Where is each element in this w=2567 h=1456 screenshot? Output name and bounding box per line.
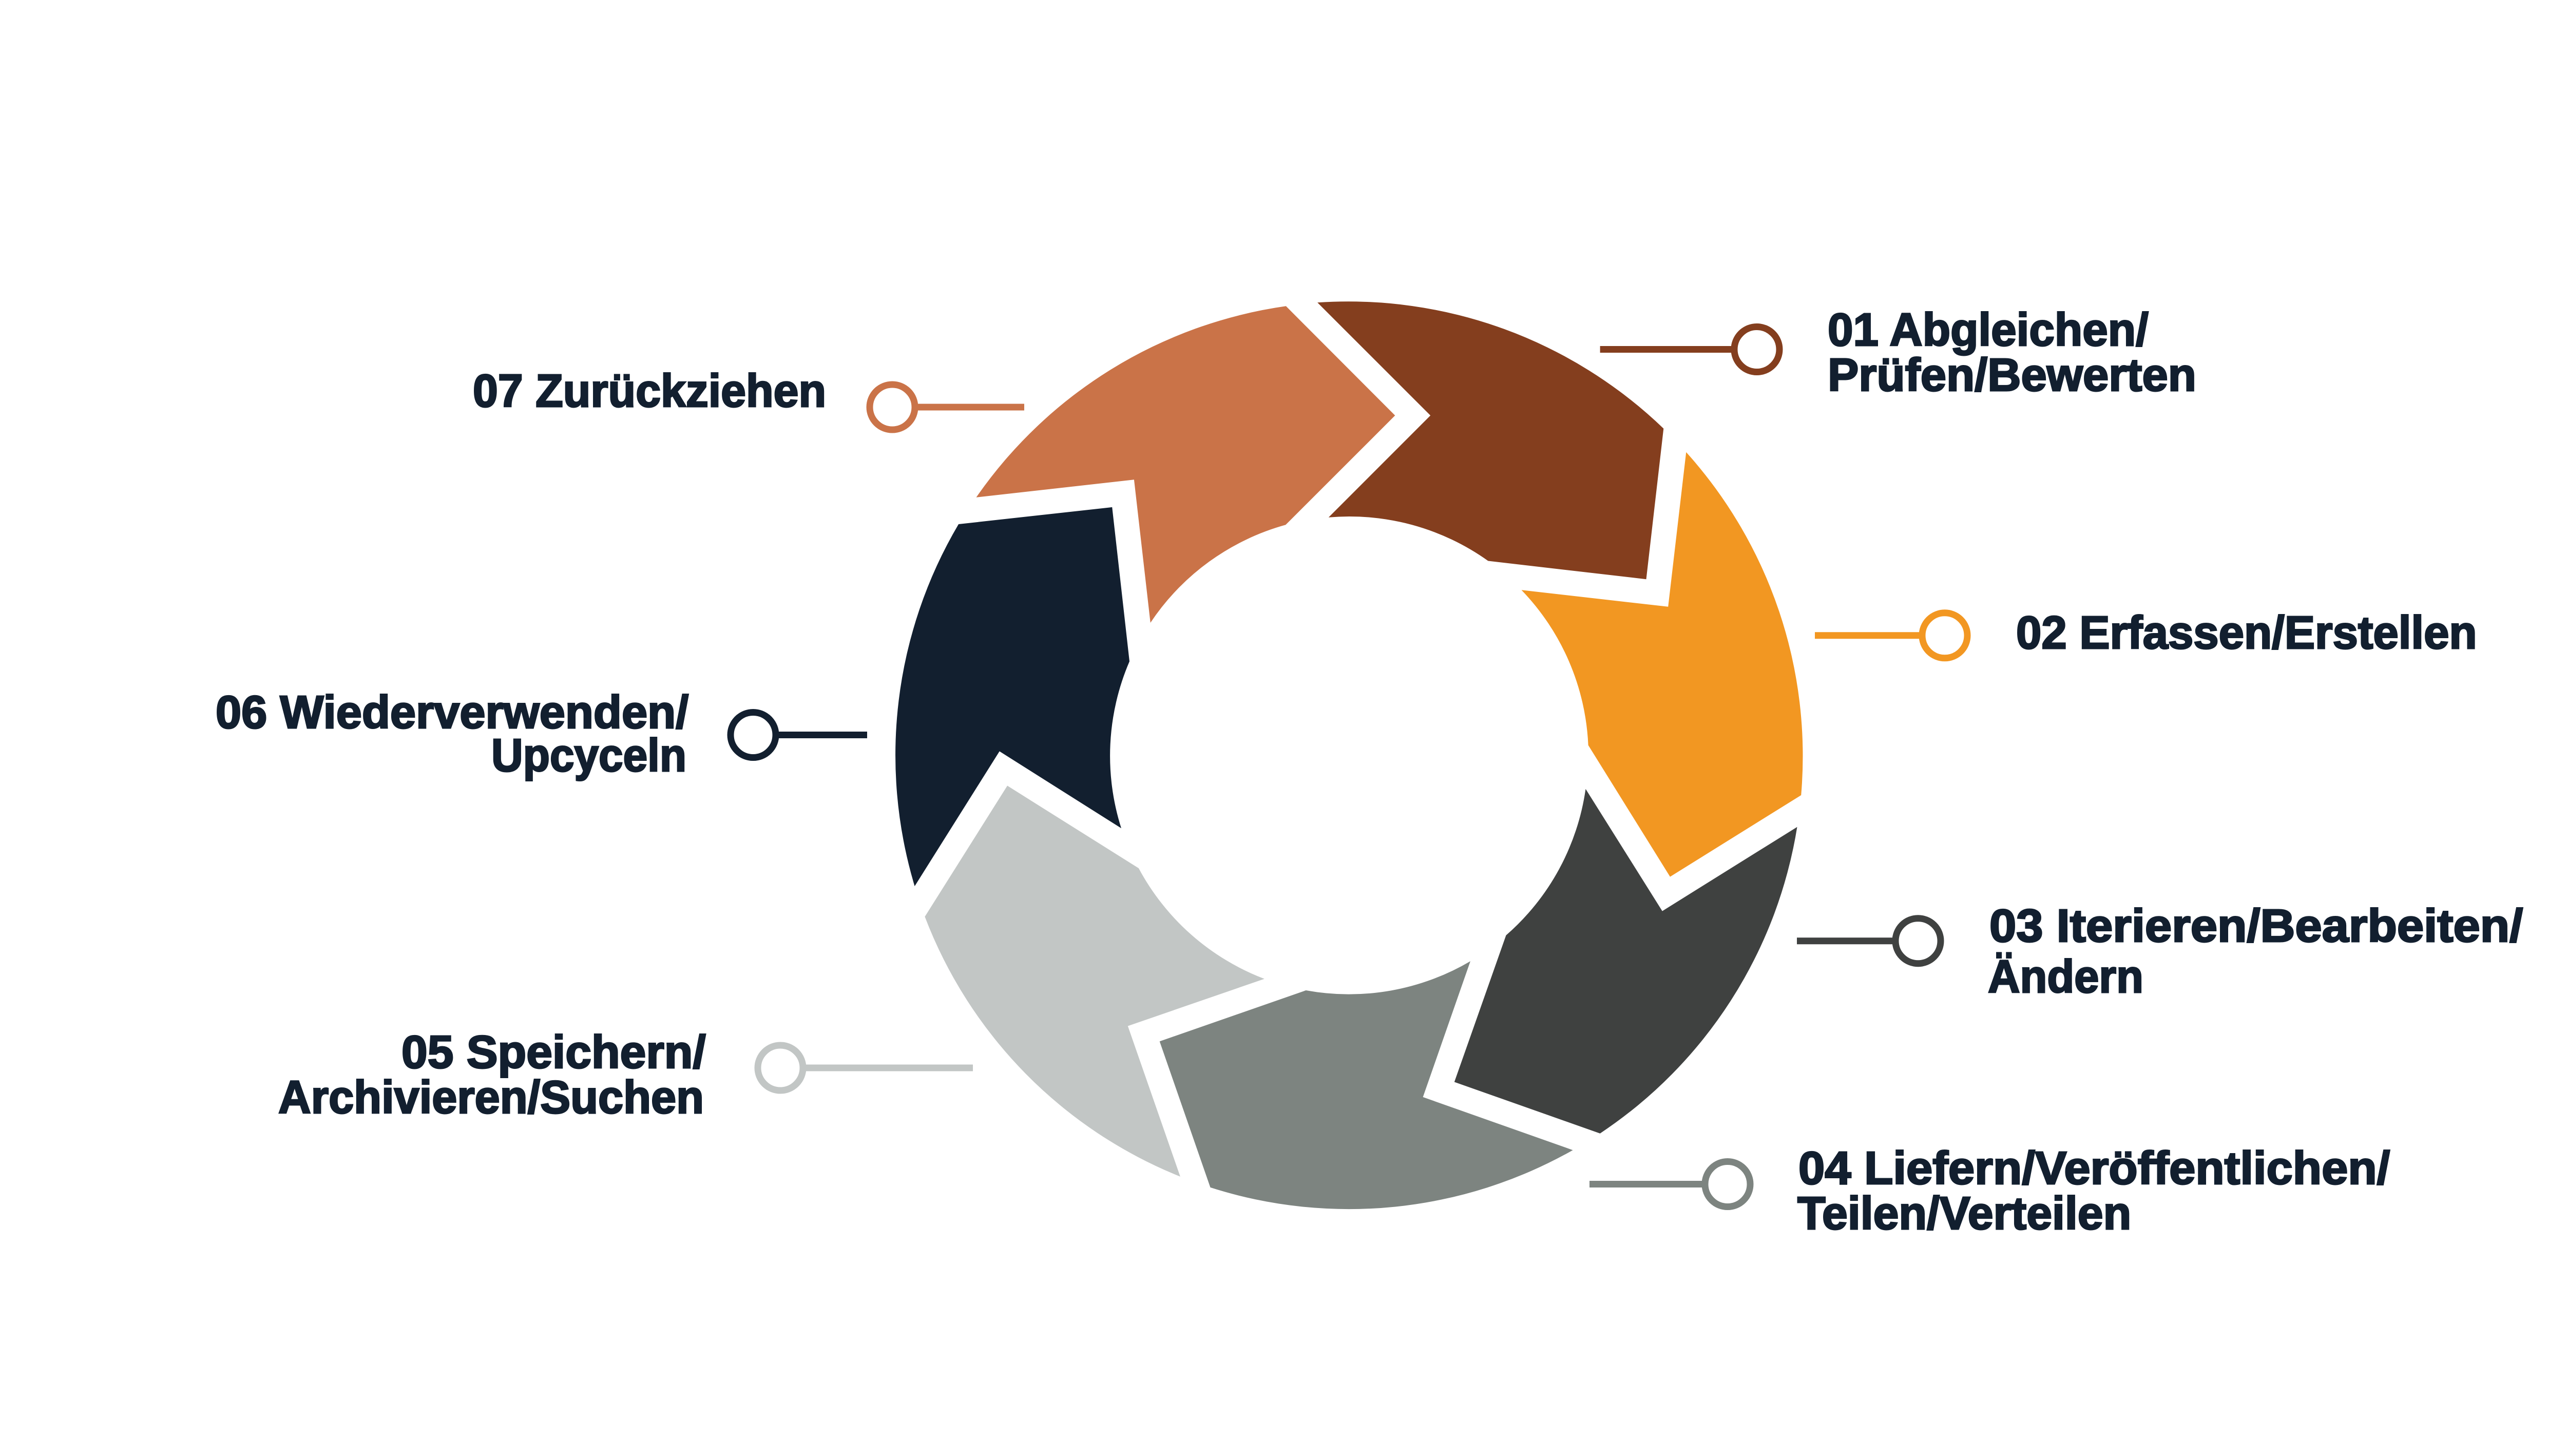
callout 01 Abgleichen	[1600, 304, 2196, 401]
connector 06	[731, 713, 867, 758]
callout 07 Zurückziehen	[473, 365, 1024, 430]
connector 05	[758, 1045, 973, 1090]
text 04: Teilen/Verteilen	[1797, 1188, 2131, 1239]
callout 04 Liefern	[1589, 1143, 2390, 1239]
text 05	[278, 1027, 706, 1123]
text 07: 07 Zurückziehen	[473, 365, 826, 416]
segment 04 grey arrow	[1160, 961, 1573, 1209]
connector 03	[1797, 918, 1941, 964]
cycle ring of seven arrow segments	[895, 301, 1803, 1209]
segment 05 light grey arrow	[925, 786, 1265, 1177]
text 04: 04 Liefern/Veröffentlichen/	[1798, 1143, 2390, 1194]
text 06: Upcyceln	[491, 730, 686, 781]
text 03	[1988, 901, 2523, 1002]
segment 03 charcoal arrow	[1454, 789, 1797, 1134]
connector 04	[1589, 1161, 1750, 1206]
text 02: 02 Erfassen/Erstellen	[2016, 606, 2477, 658]
text 06: 06 Wiederverwenden/	[216, 686, 688, 738]
segment 01 brown arrow	[1317, 301, 1663, 579]
callout 02 Erfassen	[1815, 606, 2477, 658]
segment 06 navy arrow	[895, 507, 1129, 886]
text 01: Prüfen/Bewerten	[1828, 349, 2196, 401]
callout 05 Speichern	[278, 1027, 973, 1123]
text 03: 03 Iterieren/Bearbeiten/	[1989, 901, 2523, 952]
segment 07 terracotta arrow	[976, 306, 1395, 623]
text 05: Archivieren/Suchen	[278, 1071, 704, 1123]
connector 02	[1815, 613, 1967, 658]
segment 02 orange arrow	[1522, 452, 1803, 877]
text 01	[1828, 304, 2196, 401]
connector 07	[870, 385, 1024, 430]
text 05: 05 Speichern/	[401, 1027, 706, 1078]
connector 01	[1600, 327, 1779, 372]
text 06	[216, 686, 688, 781]
text 01: 01 Abgleichen/	[1828, 304, 2149, 355]
text 03: Ändern	[1988, 950, 2143, 1002]
text 04	[1797, 1143, 2390, 1239]
callout 06 Wiederverwenden	[216, 686, 867, 781]
callout 03 Iterieren	[1797, 901, 2523, 1002]
